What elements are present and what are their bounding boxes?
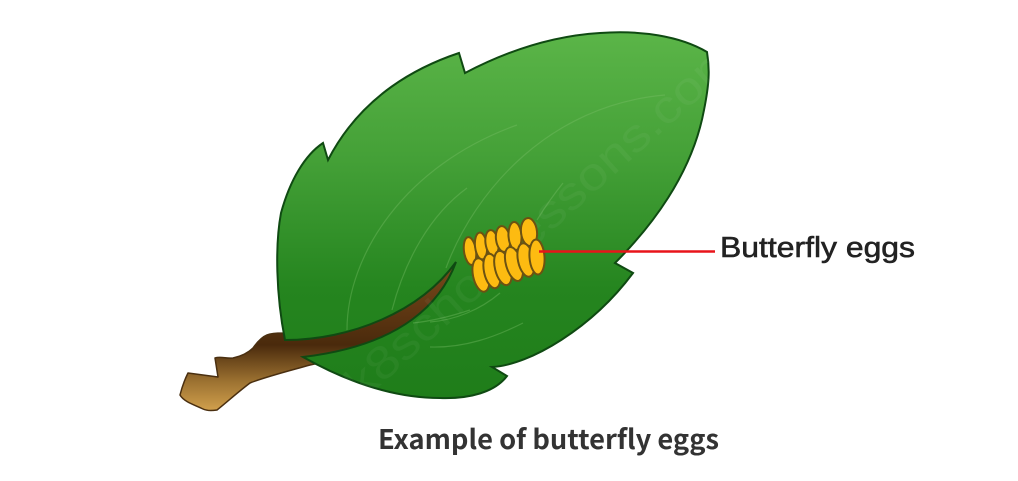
label: Butterfly eggs: Butterfly eggs bbox=[720, 232, 915, 264]
leaf blade bbox=[277, 30, 748, 409]
caption: Example of butterfly eggs bbox=[378, 418, 719, 457]
arrow: pointer line to eggs bbox=[539, 250, 715, 253]
watermark: k8schoollessons.com bbox=[334, 30, 748, 409]
leaf veins bbox=[347, 95, 665, 347]
twig bbox=[180, 262, 456, 410]
butterfly eggs cluster bbox=[462, 217, 546, 293]
